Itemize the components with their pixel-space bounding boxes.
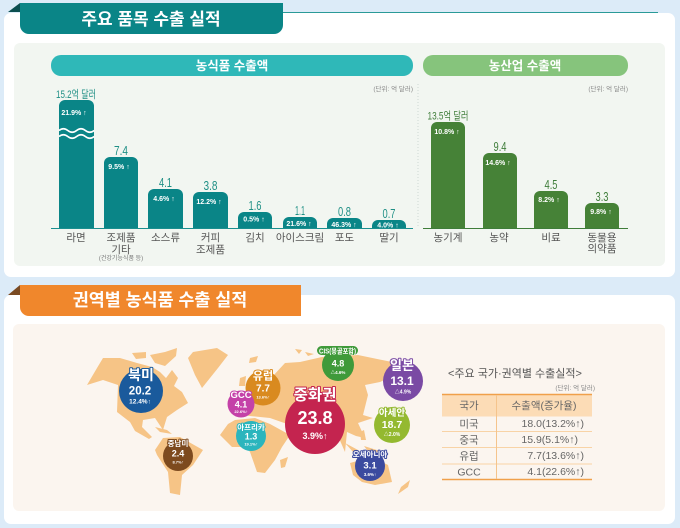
bar: strawberries [372,206,406,244]
bar: pesticides: 농약 [489,232,509,244]
bar: veterinary medicine [585,189,619,255]
bar: kimchi: 1.6 [248,198,262,213]
unit label: food: (단위: 억 달러) [373,84,413,93]
bar: farm machinery: 농기계 [434,232,462,244]
bubble: Oceania [353,449,387,481]
bubble: Africa: 1.3 [245,432,257,442]
bar: farm machinery: 10.8% ↑ [434,129,460,136]
bubble: Greater China: 3.9%↑ [302,431,328,441]
bubble: Japan: 일본 [390,358,414,373]
bar: kimchi: 0.5% ↑ [243,216,265,224]
unit label: agri: (단위: 억 달러) [588,84,628,93]
bar: kimchi: 김치 [245,232,265,244]
table: exports by country and region [442,394,592,480]
table: exports by country and region: 15.9(5.1%↑) [521,434,578,446]
bubble: Europe: 13.6%↑ [256,394,270,400]
bubble: ASEAN: 아세안 [379,407,405,419]
heading: main export items: 주요 품목 수출 실적 [81,10,221,29]
bubble: North America: 12.4%↑ [129,398,151,406]
bubble: CIS: △4.6% [331,369,345,375]
bar: sauces: 4.1 [159,175,172,190]
bubble: GCC: 22.6%↑ [234,409,248,414]
table: exports by country and region: 유럽 [459,450,479,462]
bar: veterinary medicine: 3.3 [596,189,608,204]
bar: sauces [148,175,183,244]
bar: veterinary medicine: 동물용 [588,232,617,244]
table: exports by country and region: 국가 [459,400,479,412]
table: exports by country and region: 중국 [459,434,479,446]
heading: main export items [8,3,283,34]
bar: fertilizer: 비료 [541,232,561,244]
bubble: Africa: 19.1%↑ [244,442,258,446]
bubble: ASEAN: 18.7 [382,419,402,431]
bar: ice cream: 1.1 [295,203,305,218]
bubble: North America: 북미 [128,367,154,383]
bubble: Africa [236,421,266,451]
bubble: Oceania: 오세아니아 [353,449,387,459]
bar: strawberries: 딸기 [379,232,399,244]
heading: regional food exports [8,285,301,316]
bar: fertilizer [534,177,568,244]
bar: pesticides [483,139,517,244]
bubble: Greater China [285,386,345,454]
table: exports by country and region: 수출액(증가율) [512,400,576,412]
bar: ice cream: 21.6% ↑ [286,221,312,228]
bar: fertilizer: 8.2% ↑ [538,197,560,204]
bubble: Europe [246,370,280,406]
table unit: (단위: 억 달러) [555,383,595,392]
heading: food export value [51,55,413,76]
bar: sauces: 소스류 [151,232,180,244]
bar: farm machinery: 13.5억 달러 [428,110,468,122]
bubble: Oceania: 3.6%↑ [364,472,376,477]
bar: ice cream: 아이스크림 [276,232,324,244]
bar: grapes: 0.8 [338,204,351,219]
bubble: Central and South America: 중남미 [168,438,188,448]
bar: pesticides: 14.6% ↑ [485,160,511,167]
heading: agricultural industry export value [423,55,628,76]
bubble: ASEAN [374,407,410,443]
bar: coffee [193,178,228,256]
bar: processed foods: (건강기능식품 등) [99,254,143,262]
bubble: Central and South America [163,438,193,471]
bar: coffee: 커피 [201,232,220,244]
bar: kimchi [238,198,272,244]
panel: regional food exports [4,295,675,524]
bubble: Europe: 유럽 [253,370,273,382]
bubble: Japan [383,358,423,401]
bubble: GCC: 4.1 [235,400,247,410]
bar: grapes: 포도 [335,232,354,244]
bubble: Oceania: 3.1 [363,460,377,472]
bubble: GCC [228,390,254,418]
bar: ramen: 라면 [66,232,86,244]
panel: main export items [4,12,675,277]
bubble: Central and South America: 2.4 [172,448,184,458]
bar: processed foods: 7.4 [114,143,128,158]
bubble: ASEAN: △2.0% [384,431,401,438]
bubble: GCC: GCC [230,390,252,401]
table: exports by country and region: 18.0(13.2%↑) [522,418,584,430]
bar: veterinary medicine: 의약품 [588,243,617,255]
bar: coffee: 3.8 [204,178,218,193]
world map [87,348,410,495]
bar: processed foods [99,143,143,262]
bar: grapes: 46.3% ↑ [331,222,357,229]
table: exports by country and region: 7.7(13.6%↑) [527,450,584,462]
bar: veterinary medicine: 9.8% ↑ [590,209,612,216]
bar: coffee: 조제품 [196,244,225,256]
bar: processed foods: 기타 [111,244,131,256]
bar: fertilizer: 4.5 [544,177,558,192]
bar: ramen: 21.9% ↑ [61,110,87,117]
table: exports by country and region: 미국 [459,418,479,430]
bubble: Greater China: 23.8 [297,408,333,428]
bubble: CIS: CIS(몽골포함) [319,346,356,356]
bar: processed foods: 조제품 [107,232,136,244]
bubble: Central and South America: 8.7%↑ [172,460,184,464]
bubble: CIS [317,346,358,381]
heading: food export value: 농식품 수출액 [196,59,268,73]
bar: ramen: 15.2억 달러 [56,88,96,101]
table: exports by country and region: GCC [457,466,481,478]
bubble: Japan: 13.1 [390,374,414,388]
bubble: Japan: △4.9% [395,388,412,396]
bar: strawberries: 0.7 [382,206,396,221]
bubble: Greater China: 중화권 [294,386,336,404]
bubble: CIS: 4.8 [332,358,344,368]
bar chart: agricultural industry exports [423,110,628,255]
bar: sauces: 4.6% ↑ [153,196,175,203]
heading: agricultural industry export value: 농산업 수출액 [489,59,561,73]
bar: pesticides: 9.4 [494,139,506,154]
bar: ice cream [276,203,324,244]
bubble: North America [119,367,163,413]
heading: regional food exports: 권역별 농식품 수출 실적 [73,290,247,310]
table: exports by country and region: 4.1(22.6%↑) [527,466,584,478]
bar: processed foods: 9.5% ↑ [108,164,130,171]
bar chart: food exports [51,88,413,262]
bar: farm machinery [428,110,468,244]
bar: strawberries: 4.0% ↑ [377,222,399,230]
bar: grapes [327,204,362,244]
bubble: Europe: 7.7 [256,384,270,394]
bar: coffee: 12.2% ↑ [196,199,222,206]
bubble: North America: 20.2 [129,386,151,398]
table title: <주요 국가·권역별 수출실적> [448,367,582,380]
bar: ramen [56,88,96,244]
bubble: Africa: 아프리카 [237,422,265,432]
